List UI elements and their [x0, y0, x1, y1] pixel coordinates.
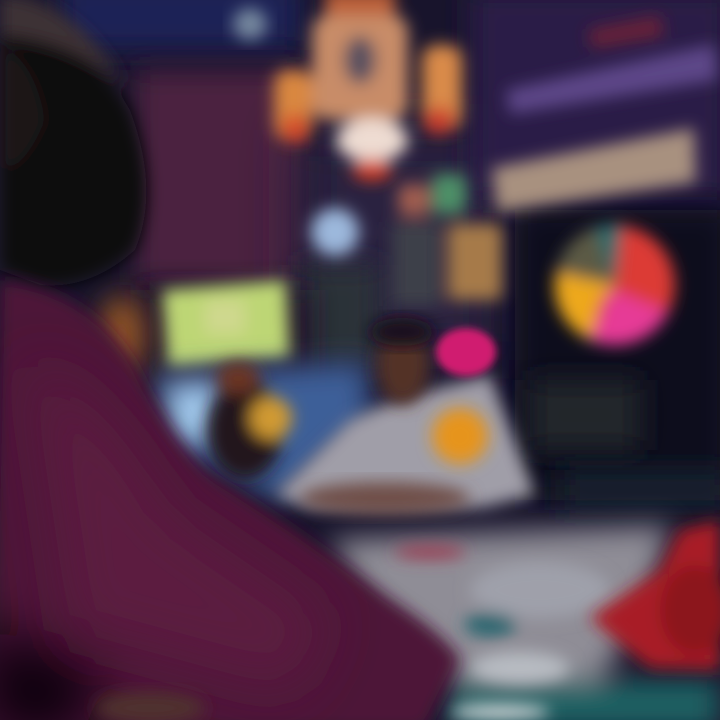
chart: colourful pie — [555, 224, 675, 345]
icon: rocket-shaped orange graphic — [274, 0, 462, 181]
figure: foreground head in silhouette — [0, 0, 146, 286]
icons: small tile cluster in centre — [311, 174, 502, 306]
figure: orange glow by head — [98, 295, 146, 375]
panel: desk and bright light area — [150, 362, 720, 720]
panel: lime green screen — [162, 280, 290, 368]
object: red crumpled shape lower right — [590, 520, 720, 670]
icon: orange circle — [432, 408, 488, 464]
figure: shading on shoulder — [0, 360, 330, 720]
panel: beige title banner — [492, 128, 696, 212]
icon: pink circle — [436, 328, 496, 376]
figure: seated person in white shirt — [275, 318, 535, 514]
figure: foreground maroon shoulder — [0, 280, 460, 720]
icon: pale ceiling light — [233, 8, 267, 40]
icon: dark figure with yellow circle — [207, 362, 292, 480]
panel: purple heading bars top right — [506, 16, 718, 114]
figure: hand at bottom — [95, 692, 205, 720]
chart: multicolour table chart — [394, 545, 610, 720]
